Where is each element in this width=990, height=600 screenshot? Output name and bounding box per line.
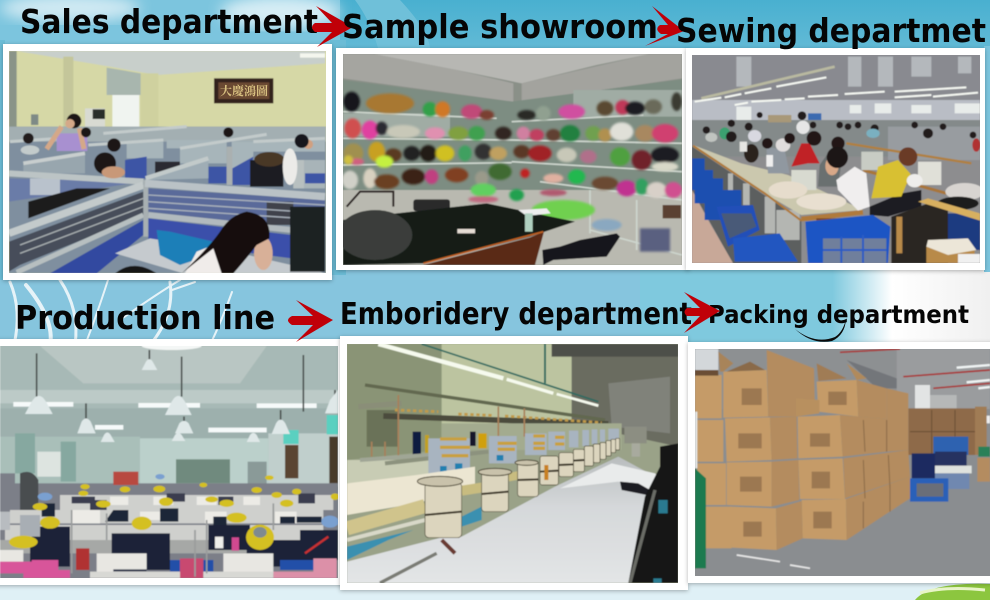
panel: sales department photo [0,44,333,280]
panel: sample showroom photo [336,48,689,270]
heading: production line: Production line [15,298,275,337]
decorative branches [10,280,232,345]
arrow: embroidery to packing [684,292,720,333]
heading: packing department: Packing department [708,300,969,329]
heading: sample showroom: Sample showroom [342,7,658,46]
decorative swoosh under packing heading [795,319,846,342]
arrow: sales to showroom [312,6,353,47]
wall plaque characters: 大慶鴻圖 [220,83,268,98]
heading: sales department: Sales department [20,2,318,41]
panel: sewing department photo [686,48,988,270]
panel: embroidery department photo [340,336,688,590]
panel: production line photo [0,339,345,585]
panel: packing department photo [688,342,990,583]
heading: embroidery department: Emboridery department [340,297,692,332]
arrow: showroom to sewing [645,6,684,46]
arrow: production to embroidery [288,300,333,342]
